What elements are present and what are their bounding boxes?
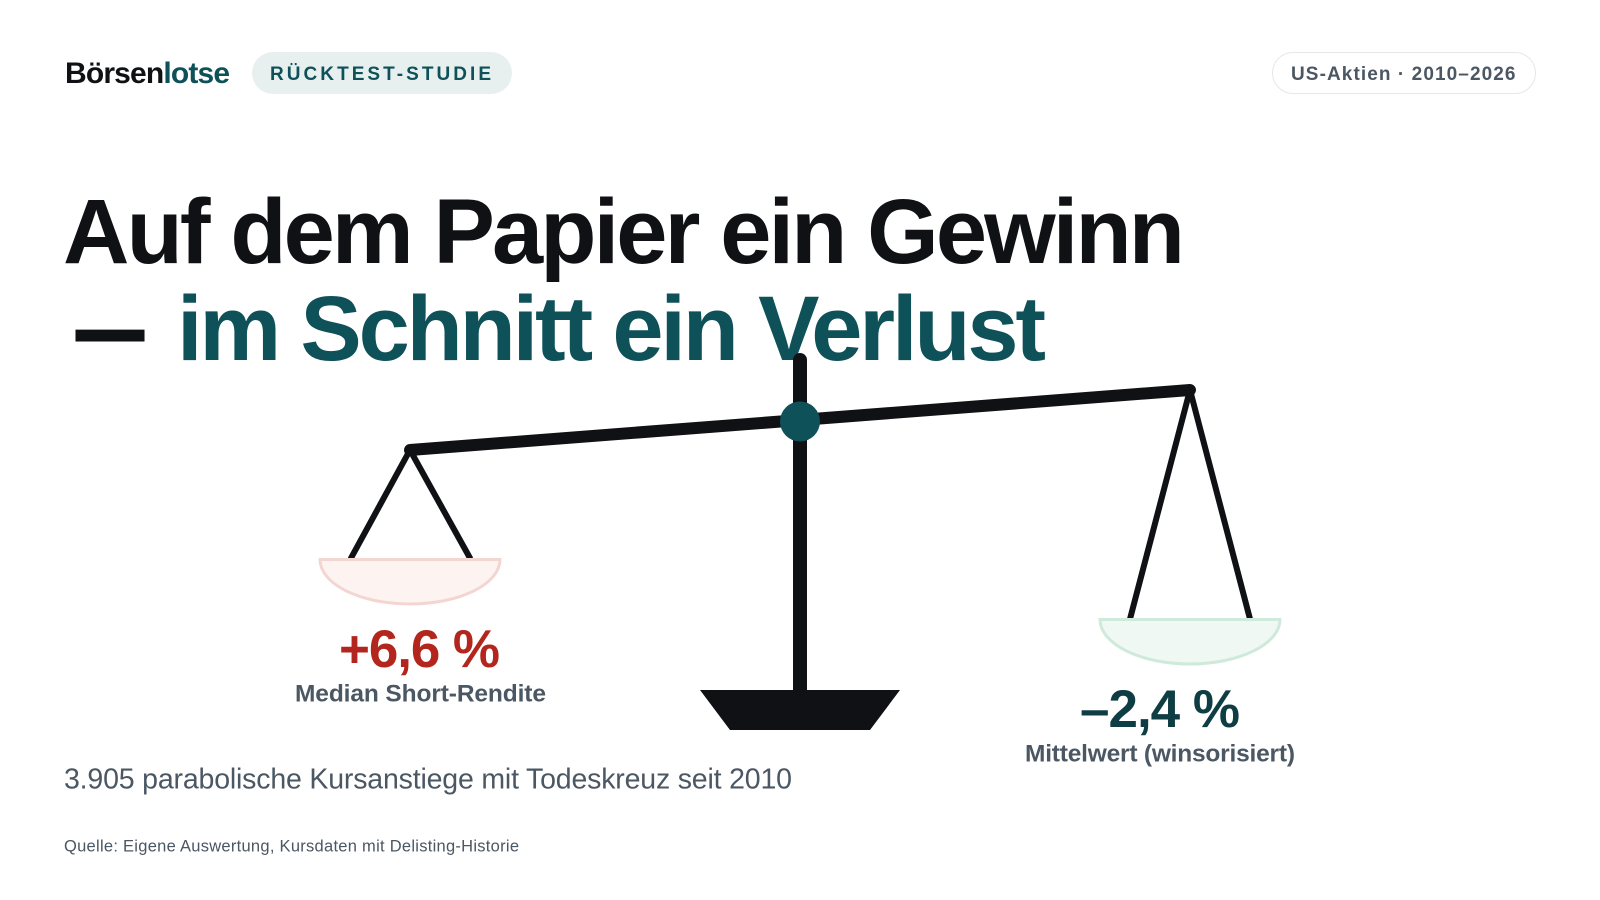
header <box>65 52 1536 94</box>
title line 1: Auf dem Papier ein Gewinn <box>63 181 1185 283</box>
right pan <box>1100 620 1280 664</box>
left value: median <box>295 620 546 708</box>
scale base <box>700 690 900 730</box>
title dash: — <box>76 260 144 394</box>
subtitle: 3.905 parabolische Kursanstiege mit Todeskreuz seit 2010 <box>64 764 792 796</box>
badge: US-Aktien 2010–2026: US-Aktien · 2010–2026 <box>1291 64 1516 85</box>
badge: US-Aktien 2010–2026 <box>1272 52 1536 94</box>
source note: Quelle: Eigene Auswertung, Kursdaten mit Delisting-Historie <box>64 838 519 856</box>
left pan cords <box>350 450 470 559</box>
pivot <box>780 402 820 442</box>
right value: mean <box>1025 680 1295 768</box>
badge: Rücktest-Studie <box>252 52 512 94</box>
title line 2: im Schnitt ein Verlust <box>177 278 1046 380</box>
label mean: Mittelwert (winsorisiert) <box>1025 740 1295 768</box>
value –2,4 %: –2,4 % <box>1080 680 1240 739</box>
title <box>63 181 1185 394</box>
scale post <box>793 360 807 695</box>
value +6,6 %: +6,6 % <box>339 620 500 679</box>
badge: Rücktest-Studie: RÜCKTEST-STUDIE <box>270 64 491 85</box>
scale beam <box>410 390 1190 450</box>
balance scale <box>320 360 1280 730</box>
left pan <box>320 560 500 604</box>
logo: Börsenlotse <box>65 57 230 90</box>
right pan cords <box>1130 390 1250 619</box>
label median: Median Short-Rendite <box>295 680 546 708</box>
